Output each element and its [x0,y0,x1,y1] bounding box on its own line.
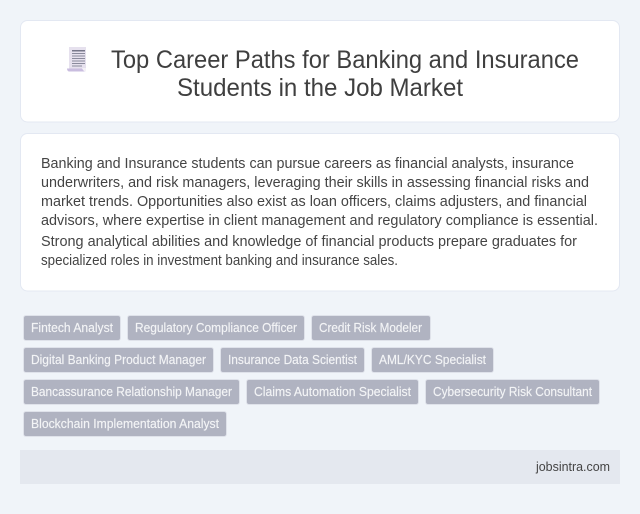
tag: Insurance Data Scientist: Insurance Data Scientist [228,353,357,367]
tag: Claims Automation Specialist: Claims Automation Specialist [254,385,412,399]
tag: Blockchain Implementation Analyst: Blockchain Implementation Analyst [31,417,219,431]
footer [20,450,620,484]
tag: Credit Risk Modeler [312,316,430,340]
tag: Regulatory Compliance Officer: Regulatory Compliance Officer [135,321,297,335]
panel: summary text: market trends. Opportunities also exist as loan officers, claims adjusters, and financial [41,194,587,210]
tag: Cybersecurity Risk Consultant [426,380,600,404]
panel: summary text: Strong analytical abilities and knowledge of financial products prepare graduates for [41,234,577,250]
tag: Bancassurance Relationship Manager [24,380,240,404]
tag: Bancassurance Relationship Manager: Bancassurance Relationship Manager [31,385,232,399]
tag: Credit Risk Modeler: Credit Risk Modeler [319,321,422,335]
tag: Blockchain Implementation Analyst [24,412,226,436]
panel: summary text: specialized roles in investment banking and insurance sales. [41,253,398,269]
tag: Fintech Analyst: Fintech Analyst [31,321,114,335]
tag: Insurance Data Scientist [220,348,364,372]
icon: document scroll [67,47,86,72]
tag: Digital Banking Product Manager: Digital Banking Product Manager [31,353,206,367]
panel: summary text: underwriters, and risk managers, leveraging their skills in assessing financial risks and [41,175,589,191]
footer: jobsintra.com [535,460,610,474]
tag list [24,316,600,436]
heading: Students in the Job Market [177,75,463,102]
tag: Regulatory Compliance Officer [128,316,304,340]
panel: summary text [20,134,620,291]
tag: Digital Banking Product Manager [24,348,214,372]
tag: Fintech Analyst [24,316,120,340]
tag: AML/KYC Specialist [372,348,494,372]
tag: Cybersecurity Risk Consultant: Cybersecurity Risk Consultant [433,385,592,399]
heading [111,47,579,102]
heading: Top Career Paths for Banking and Insurance [111,47,579,74]
panel: summary text: advisors, where expertise in client management and regulatory compliance is essential. [41,213,598,229]
tag: Claims Automation Specialist [246,380,418,404]
tag: AML/KYC Specialist: AML/KYC Specialist [379,353,486,367]
panel: header [20,20,620,122]
panel: summary text: Banking and Insurance students can pursue careers as financial analysts, insurance [41,156,574,172]
